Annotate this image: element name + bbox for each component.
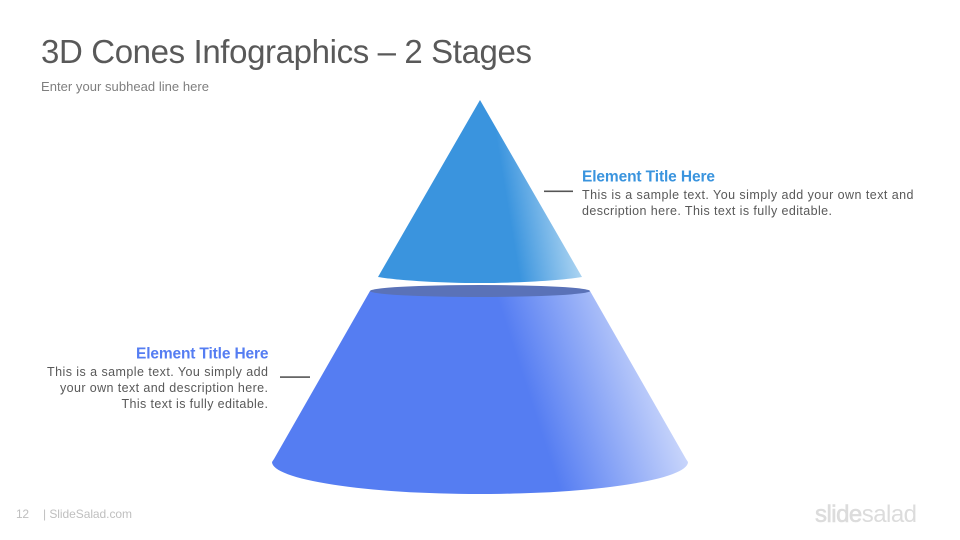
logo: slidesalad: [815, 501, 917, 528]
connector line: [280, 376, 310, 378]
callout: top stage: [544, 168, 914, 218]
element title: Element Title Here: [582, 168, 715, 186]
footer: page number and site: 12: [16, 507, 29, 521]
cone: top stage: [378, 100, 582, 283]
description: This text is fully editable.: [122, 397, 268, 411]
callout: bottom stage: [47, 346, 310, 411]
description: your own text and description here.: [60, 381, 268, 395]
subhead: Enter your subhead line here: [41, 79, 209, 94]
description: This is a sample text. You simply add: [47, 365, 268, 379]
description: description here. This text is fully editable.: [582, 204, 832, 218]
description: [47, 365, 268, 411]
footer: page number and site: | SlideSalad.com: [43, 507, 132, 521]
description: [582, 188, 914, 218]
description: This is a sample text. You simply add your own text and: [582, 188, 914, 202]
element title: Element Title Here: [136, 346, 269, 362]
cone: bottom stage: [272, 285, 688, 494]
title: 3D Cones Infographics – 2 Stages: [41, 33, 532, 70]
connector line: [544, 190, 573, 192]
top opening of bottom cone: [370, 285, 590, 297]
